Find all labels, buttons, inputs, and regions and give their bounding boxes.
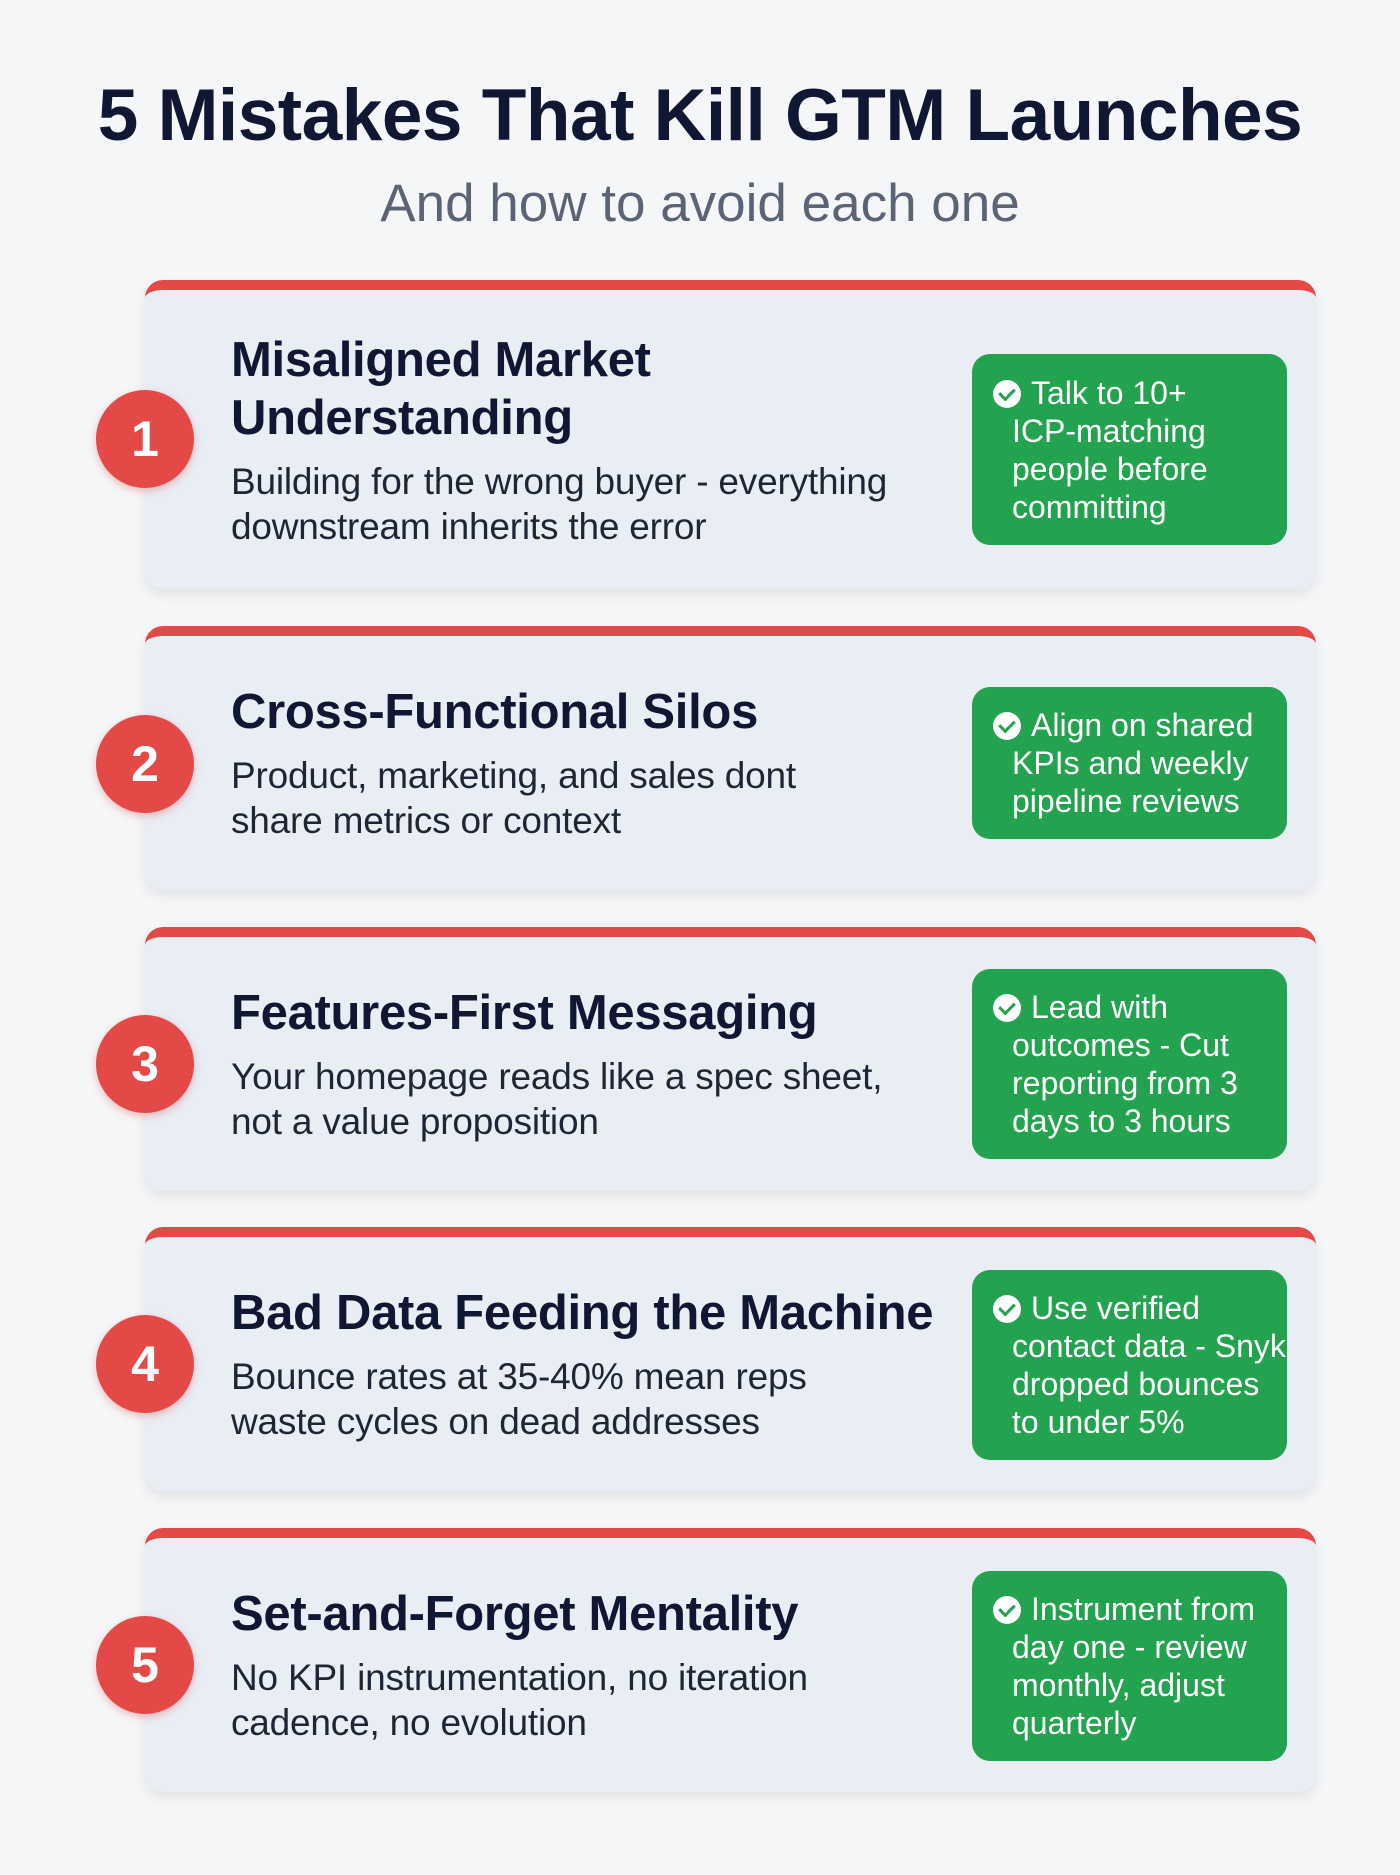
text: mistake 5: No KPI instrumentation, no iteration (231, 1657, 808, 1698)
text: mistake 1: downstream inherits the error (231, 506, 706, 546)
number badge 3 (96, 1015, 194, 1113)
number badge 2: 2 (131, 736, 159, 792)
callout: fix 2: pipeline reviews (1012, 783, 1240, 819)
callout: fix 3 (972, 969, 1287, 1159)
text: mistake 5: Set-and-Forget Mentality (231, 1587, 798, 1641)
text: mistake 2: Product, marketing, and sales dont (231, 755, 796, 796)
text: mistake 2 (231, 685, 796, 841)
text: mistake 2: Cross-Functional Silos (231, 685, 758, 739)
callout: fix 4: to under 5% (1012, 1404, 1185, 1440)
callout: fix 4: Use verified (1031, 1290, 1200, 1326)
callout: fix 5: Instrument from (1031, 1591, 1255, 1627)
text: mistake 1: Misaligned Market (231, 332, 651, 386)
callout: fix 1 (972, 354, 1287, 545)
callout: fix 5 (972, 1571, 1287, 1761)
panel: mistake 1 (145, 280, 1316, 589)
callout: fix 5: day one - review (1012, 1629, 1247, 1665)
callout: fix 4: contact data - Snyk (1012, 1328, 1286, 1364)
callout: fix 3: reporting from 3 (1012, 1065, 1238, 1101)
callout: fix 2: KPIs and weekly (1012, 745, 1249, 781)
text: mistake 5 (231, 1587, 808, 1743)
text: mistake 1: Understanding (231, 390, 573, 444)
number badge 1 (96, 390, 194, 488)
callout: fix 3: outcomes - Cut (1012, 1027, 1229, 1063)
callout: fix 4 (972, 1270, 1287, 1460)
callout: fix 3: days to 3 hours (1012, 1103, 1231, 1139)
panel: mistake 4 (145, 1227, 1316, 1491)
text: mistake 1 (231, 332, 887, 546)
callout: fix 3: Lead with (1031, 989, 1168, 1025)
number badge 4: 4 (131, 1336, 159, 1392)
title: 5 Mistakes That Kill GTM Launches (98, 75, 1302, 156)
callout: fix 2: Align on shared (1031, 707, 1253, 743)
text: mistake 4: Bounce rates at 35-40% mean reps (231, 1356, 807, 1397)
text: mistake 4 (231, 1286, 933, 1442)
number badge 2 (96, 715, 194, 813)
number badge 1: 1 (131, 411, 159, 467)
number badge 5 (96, 1616, 194, 1714)
callout: fix 1: committing (1012, 488, 1167, 524)
callout: fix 5: quarterly (1012, 1705, 1136, 1741)
callout: fix 1: people before (1012, 450, 1208, 486)
subtitle: And how to avoid each one (380, 174, 1020, 233)
number badge 5: 5 (131, 1637, 159, 1693)
callout: fix 2 (972, 687, 1287, 839)
number badge 4 (96, 1315, 194, 1413)
text: mistake 2: share metrics or context (231, 800, 621, 841)
panel: mistake 2 (145, 626, 1316, 890)
callout: fix 5: monthly, adjust (1012, 1667, 1225, 1703)
text: mistake 3: Your homepage reads like a spec sheet, (231, 1056, 882, 1097)
callout: fix 4: dropped bounces (1012, 1366, 1259, 1402)
panel: mistake 3 (145, 927, 1316, 1191)
panel: mistake 5 (145, 1528, 1316, 1792)
callout: fix 1: Talk to 10+ (1031, 374, 1187, 410)
number badge 3: 3 (131, 1036, 159, 1092)
text: mistake 3 (231, 986, 882, 1142)
text: mistake 4: waste cycles on dead addresses (231, 1401, 760, 1442)
text: mistake 3: not a value proposition (231, 1101, 599, 1142)
text: mistake 5: cadence, no evolution (231, 1702, 587, 1743)
text: mistake 3: Features-First Messaging (231, 986, 817, 1040)
text: mistake 1: Building for the wrong buyer - everything (231, 460, 887, 502)
callout: fix 1: ICP-matching (1012, 412, 1206, 448)
text: mistake 4: Bad Data Feeding the Machine (231, 1286, 933, 1340)
